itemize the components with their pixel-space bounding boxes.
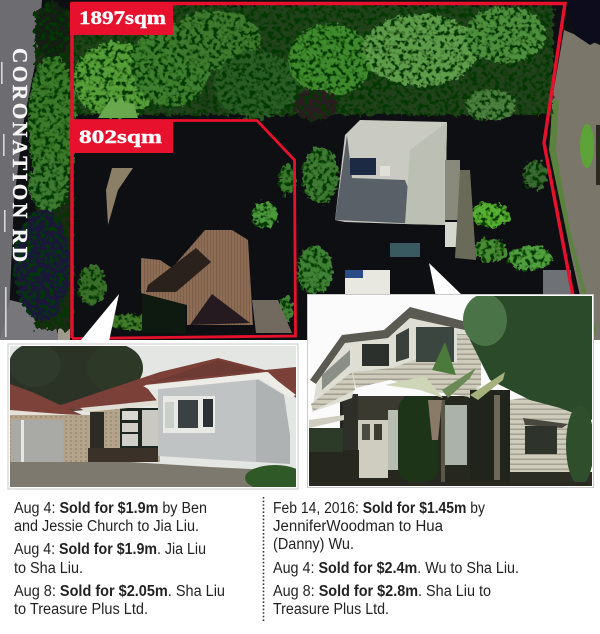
sale 2: Aug 4: Sold for $1.9m. Jia Liu — [14, 541, 206, 558]
callout pointer: right house — [429, 263, 464, 297]
sale 1 — [14, 500, 207, 535]
road: Coronation Rd — [0, 0, 70, 340]
house: right aerial roof — [335, 120, 571, 296]
sale 1: Aug 4: Sold for $1.9m by Ben — [14, 500, 207, 517]
road: right side driveway — [549, 0, 600, 340]
sale 2: Aug 4: Sold for $2.4m. Wu to Sha Liu. — [273, 560, 519, 577]
ground floor — [309, 394, 510, 486]
house: left aerial roof — [106, 168, 292, 333]
grey extension — [143, 372, 296, 464]
site boundary: 802 sqm — [72, 120, 296, 338]
sale 3: Aug 8: Sold for $2.8m. Sha Liu to — [273, 583, 491, 600]
sale 1: Feb 14, 2016: Sold for $1.45m by — [273, 500, 485, 517]
photo: left house — [8, 339, 305, 491]
sale 1: and Jessie Church to Jia Liu. — [14, 518, 199, 535]
ground — [359, 482, 592, 486]
garage and brick wall — [10, 400, 160, 462]
photo: right house — [308, 294, 594, 488]
sale 2: to Sha Liu. — [14, 560, 83, 577]
palm — [385, 342, 505, 485]
sale 3: Treasure Plus Ltd. — [273, 601, 389, 618]
sale 3: Aug 8: Sold for $2.05m. Sha Liu — [14, 583, 225, 600]
sale 3 — [273, 583, 491, 618]
label: 1897sqm: 1897sqm — [79, 8, 166, 29]
driveway — [10, 462, 254, 487]
sale 1 — [273, 500, 485, 553]
shrub — [245, 465, 296, 487]
right wing — [510, 395, 592, 484]
sale history: right house — [273, 500, 519, 618]
sale history: left house — [14, 500, 225, 618]
planter — [88, 448, 158, 462]
sale 2 — [14, 541, 206, 577]
dotted divider — [262, 497, 264, 623]
foliage — [14, 2, 553, 330]
aerial photo — [0, 0, 600, 340]
sale 1: JenniferWoodman to Hua — [273, 518, 443, 535]
label: 802sqm: 802sqm — [79, 127, 162, 148]
label: 802sqm — [70, 120, 173, 153]
sale 3: to Treasure Plus Ltd. — [14, 601, 148, 618]
callout pointer: left house — [76, 294, 119, 346]
sale 1: (Danny) Wu. — [273, 536, 354, 553]
site boundary: 1897 sqm — [72, 4, 573, 338]
road name: Coronation Rd: CORONATION RD — [8, 48, 32, 262]
trees behind house — [10, 346, 143, 411]
sale 3 — [14, 583, 225, 618]
upper storey — [310, 307, 481, 412]
roofs — [10, 358, 296, 419]
palm tree — [98, 96, 138, 118]
tree — [463, 294, 594, 485]
ivy column — [398, 396, 438, 482]
label: 1897sqm — [70, 3, 173, 35]
